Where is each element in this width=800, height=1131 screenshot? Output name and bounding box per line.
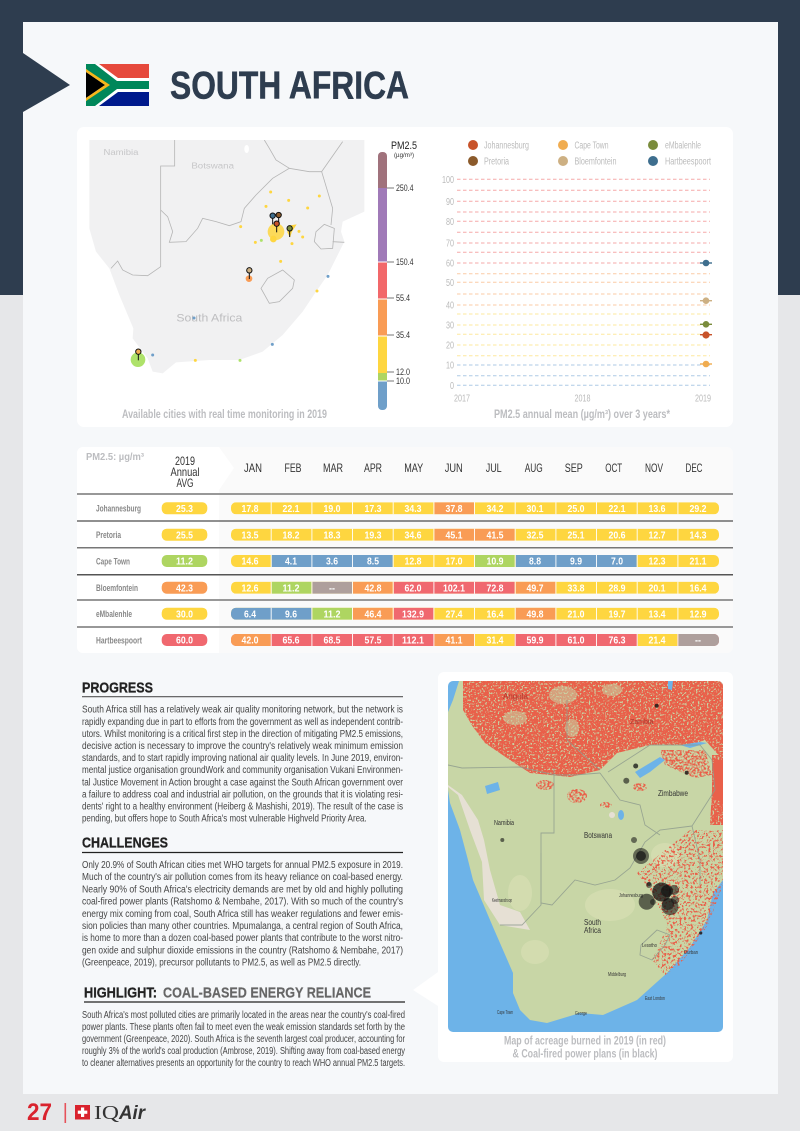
- country borders: [448, 700, 715, 960]
- monthly values: 34.3: [404, 503, 422, 515]
- monthly values: 12.8: [404, 556, 422, 568]
- text block: progress: utors. Whilst monitoring is a critical first step in the direction of mitigating PM2.5 emissions,: [82, 729, 403, 740]
- monthly values: 3.6: [326, 556, 338, 568]
- line chart: annual mean over 3 years: 0: [450, 381, 454, 392]
- legend: PM2.5 colour scale: 55.4: [396, 293, 410, 304]
- panel: burn map card: [413, 672, 733, 1062]
- monthly values: --: [695, 635, 701, 647]
- map pins: [136, 212, 292, 360]
- place labels: Africa: [584, 926, 601, 935]
- monthly values: 46.4: [364, 608, 382, 620]
- text block: challenges: Nearly 90% of South Africa's electricity demands are met by old and highly polluting: [82, 884, 403, 895]
- monthly values: 19.3: [364, 529, 382, 541]
- heading: progress: PROGRESS: [82, 680, 153, 697]
- text block: challenges: (Greenpeace, 2019), precursor pollutants to PM2.5, as well as PM2.5 directly.: [82, 958, 361, 969]
- place labels: Durban: [684, 950, 698, 956]
- heading: highlight: HIGHLIGHT:: [84, 984, 157, 1001]
- monthly values: 11.2: [282, 582, 300, 594]
- place labels: East London: [645, 996, 665, 1002]
- row labels: Johannesburg: [96, 504, 141, 514]
- monthly values: --: [329, 582, 335, 594]
- text block: progress: mental justice organisation groundWork and community organisation Vukani Environmen-: [82, 765, 403, 776]
- table header: FEB: [284, 461, 302, 475]
- monthly values: 11.2: [324, 608, 341, 620]
- text block: progress: South Africa still has a relatively weak air quality monitoring network, but the network is: [82, 705, 403, 716]
- table header: SEP: [565, 461, 583, 475]
- caption: burn map: Map of acreage burned in 2019 (in red): [504, 1036, 666, 1048]
- place labels: Cape Town: [497, 1010, 513, 1016]
- monthly values: 65.6: [282, 635, 300, 647]
- panel: monthly PM2.5 table: [77, 447, 733, 653]
- annual average pills: 25.3: [176, 503, 193, 515]
- desert coast: [448, 785, 530, 930]
- monthly values: 76.3: [608, 635, 626, 647]
- place labels: Botswana: [584, 831, 612, 840]
- monthly values: 12.3: [648, 556, 666, 568]
- monthly values: 31.4: [486, 635, 504, 647]
- row labels: Cape Town: [96, 556, 130, 568]
- line chart: annual mean over 3 years: 30: [446, 320, 454, 332]
- caption: annual chart: PM2.5 annual mean (µg/m³) over 3 years*: [494, 409, 670, 421]
- place labels: [492, 692, 698, 1017]
- legend: cities: Bloemfontein: [574, 156, 616, 168]
- row: Hartbeespoort: [231, 634, 719, 646]
- text block: progress: a failure to address coal and industrial air pollution, on the grounds that it is violating resi-: [82, 789, 403, 800]
- logo: IQAir: [75, 1102, 147, 1124]
- place labels: Middelburg: [608, 972, 626, 978]
- coal power plants: [500, 704, 702, 935]
- legend: PM2.5 colour scale: PM2.5: [391, 140, 417, 152]
- map: available cities with monitoring: Namibia: [103, 147, 139, 157]
- text block: highlight: roughly 3% of the world's coal production (Ambrose, 2019). Shifting away from coal-based energy: [82, 1046, 405, 1057]
- monthly values: 14.3: [690, 529, 707, 541]
- monthly values: 25.1: [568, 529, 585, 541]
- text block: challenges: is home to more than a dozen coal-based power plants that contribute to the worst nitro-: [82, 933, 403, 944]
- header ribbon notch: [23, 53, 70, 112]
- table header: [86, 451, 703, 490]
- monthly values: 16.4: [690, 582, 707, 594]
- table header: Annual: [170, 465, 200, 479]
- place labels: Johannesburg: [619, 893, 643, 899]
- legend: PM2.5 colour scale: (µg/m³): [394, 152, 414, 159]
- monthly values: 30.1: [526, 503, 544, 515]
- legend: PM2.5 colour scale: 35.4: [396, 330, 410, 341]
- text block: challenges: Only 20.9% of South African cities met WHO targets for annual PM2.5 exposure in 2019.: [82, 860, 403, 871]
- monthly values: 59.9: [526, 635, 544, 647]
- annual average pills: 30.0: [176, 608, 193, 620]
- table header: MAY: [404, 461, 423, 475]
- place labels: South: [584, 918, 601, 927]
- monthly values: 12.9: [690, 608, 707, 620]
- text block: highlight: power plants. These plants often fail to meet even the weak emission standards set forth by the: [82, 1022, 405, 1033]
- monthly values: 20.6: [608, 529, 626, 541]
- legend: cities: Cape Town: [574, 140, 608, 152]
- monthly values: 42.8: [364, 582, 382, 594]
- monthly values: 29.2: [690, 503, 707, 515]
- line chart: annual mean over 3 years: 20: [446, 340, 454, 352]
- divider bar: [64, 1103, 66, 1123]
- monthly values: 28.9: [608, 582, 626, 594]
- row: Pretoria: [231, 529, 719, 541]
- monthly values: 19.0: [324, 503, 341, 515]
- legend: cities: eMbalenhle: [665, 140, 701, 152]
- row: Johannesburg: [231, 502, 719, 514]
- monthly values: 41.1: [446, 635, 463, 647]
- monthly values: 4.1: [285, 556, 297, 568]
- line chart: annual mean over 3 years: 80: [446, 217, 454, 228]
- monthly values: 42.0: [242, 635, 259, 647]
- heading: challenges: CHALLENGES: [82, 835, 168, 852]
- monthly values: 25.0: [568, 503, 585, 515]
- line chart: annual mean over 3 years: 10: [446, 360, 454, 372]
- text block: highlight: South Africa's most polluted cities are primarily located in the areas near the country's coal-fired: [82, 1010, 405, 1021]
- legend: PM2.5 colour scale: 12.0: [396, 367, 410, 378]
- line chart: annual mean over 3 years: 90: [446, 197, 454, 208]
- monthly values: 22.1: [608, 503, 626, 515]
- monthly values: 112.1: [402, 635, 424, 647]
- text block: highlight: to cleaner alternatives presents an opportunity for the country to reach WHO annual PM2.5 targets.: [82, 1058, 405, 1069]
- legend: PM2.5 colour scale: 150.4: [396, 257, 414, 268]
- legend: cities: Hartbeespoort: [665, 156, 711, 168]
- logo: IQAir: Air: [118, 1103, 147, 1124]
- table header: 2019: [175, 454, 195, 468]
- legend: cities: Pretoria: [484, 156, 509, 168]
- monthly values: 72.8: [486, 582, 504, 594]
- monthly cells background: [231, 500, 719, 648]
- monthly values: 37.8: [446, 503, 463, 515]
- monthly values: 12.6: [242, 582, 259, 594]
- legend: PM2.5 colour scale: 10.0: [396, 376, 410, 387]
- text block: highlight: [82, 1010, 405, 1069]
- table header: AUG: [525, 461, 543, 475]
- map: available cities with monitoring: [89, 140, 364, 373]
- monthly values: 61.0: [568, 635, 585, 647]
- logo: IQAir: IQ: [94, 1102, 120, 1124]
- legend: PM2.5 colour scale: [378, 140, 417, 410]
- text block: progress: [82, 705, 404, 825]
- place labels: Keetmanshoop: [492, 898, 512, 904]
- line chart: annual mean over 3 years: 40: [446, 300, 454, 312]
- monthly values: 9.6: [285, 608, 297, 620]
- table header: JUL: [486, 461, 502, 475]
- monthly values: 18.3: [324, 529, 341, 541]
- monthly values: 8.8: [529, 556, 541, 568]
- text block: progress: rapidly expanding due in part to efforts from the government as well as independent contrib-: [82, 717, 403, 728]
- row: Cape Town: [231, 555, 719, 567]
- text block: challenges: coal-fired power plants (Ratshomo & Nembahe, 2017). With so much of the country's: [82, 897, 403, 908]
- monthly values: 49.7: [526, 582, 544, 594]
- caption: monitoring map: Available cities with real time monitoring in 2019: [122, 409, 327, 421]
- text block: progress: standards, and to start rapidly improving national air quality levels. In June 2019, environ-: [82, 753, 403, 764]
- icon: South African flag: [86, 64, 149, 106]
- monthly values: 18.2: [282, 529, 300, 541]
- burned areas: [463, 681, 723, 825]
- table header: PM2.5: µg/m³: [86, 451, 144, 463]
- annual average pills: 11.2: [176, 556, 193, 568]
- row: eMbalenhle: [231, 608, 719, 620]
- legend: PM2.5 colour scale: 250.4: [396, 183, 414, 194]
- text block: challenges: Much of the country's air pollution comes from its heavy reliance on coal-based energy.: [82, 872, 403, 883]
- monthly values: 34.6: [404, 529, 422, 541]
- monthly values: 12.7: [648, 529, 666, 541]
- text block: progress: pending, but offers hope to South Africa's most vulnerable Highveld Priority Area.: [82, 814, 367, 825]
- monthly values: 22.1: [282, 503, 300, 515]
- monthly values: 13.4: [648, 608, 666, 620]
- annual average pills: 25.5: [176, 529, 193, 541]
- line chart: annual mean over 3 years: 2019: [695, 394, 711, 404]
- panel: map, scale and annual chart: [77, 127, 733, 427]
- row labels: Bloemfontein: [96, 583, 138, 594]
- legend: cities: Johannesburg: [484, 140, 529, 152]
- row labels: Hartbeespoort: [96, 636, 143, 646]
- table header: NOV: [645, 461, 663, 475]
- monthly values: 20.1: [648, 582, 666, 594]
- row labels: Pretoria: [96, 530, 121, 541]
- text block: progress: tal Justice Movement in Action brought a case against the South African government over: [82, 777, 404, 788]
- monthly values: 21.1: [690, 556, 707, 568]
- text block: challenges: [82, 860, 403, 969]
- monthly values: 19.7: [608, 608, 626, 620]
- table header: AVG: [176, 476, 194, 490]
- monthly values: 16.4: [486, 608, 504, 620]
- text block: progress: decisive action is necessary to improve the country's relatively weak minimum emission: [82, 741, 403, 752]
- monthly values: 49.8: [526, 608, 544, 620]
- text block: highlight: government (Greenpeace, 2020). South Africa is the seventh largest coal producer, accounting for: [82, 1034, 405, 1045]
- monthly values: 34.2: [486, 503, 504, 515]
- caption: burn map: & Coal-fired power plans (in black): [512, 1048, 658, 1060]
- line chart: annual mean over 3 years: 60: [446, 258, 454, 270]
- monthly values: 13.6: [648, 503, 666, 515]
- monthly values: 8.5: [367, 556, 379, 568]
- annual average pills: 42.3: [176, 582, 193, 594]
- place labels: Zimbabwe: [658, 789, 688, 798]
- monthly values: 17.3: [364, 503, 382, 515]
- title: SOUTH AFRICA: [170, 65, 409, 108]
- monthly values: [242, 503, 707, 647]
- place labels: Namibia: [494, 820, 514, 827]
- caption: burn map: [504, 1036, 666, 1060]
- pale interior: [508, 843, 679, 964]
- place labels: Zambia: [630, 719, 653, 726]
- place labels: Angola: [503, 692, 528, 701]
- legend: cities: [468, 140, 711, 168]
- table header: JUN: [445, 461, 463, 475]
- text block: progress: dents' right to a healthy environment (Heiberg & Mashishi, 2019). The result of the case is: [82, 802, 403, 812]
- water bodies: [485, 681, 707, 820]
- line chart: annual mean over 3 years: 70: [446, 238, 454, 250]
- monthly values: 27.4: [446, 608, 463, 620]
- monthly values: 132.9: [402, 608, 424, 620]
- monthly values: 102.1: [443, 582, 465, 594]
- monthly values: 17.8: [242, 503, 259, 515]
- table header: OCT: [605, 461, 623, 475]
- place labels: Lesotho: [642, 943, 657, 949]
- line chart: annual mean over 3 years: 2017: [454, 394, 470, 404]
- table header: APR: [364, 461, 382, 475]
- monthly values: 21.4: [648, 635, 666, 647]
- monthly values: 17.0: [446, 556, 463, 568]
- map: available cities with monitoring: Botswana: [191, 160, 234, 170]
- monthly values: 68.5: [324, 635, 341, 647]
- monthly values: 45.1: [446, 529, 463, 541]
- monthly values: 14.6: [242, 556, 259, 568]
- line chart: annual mean over 3 years: [442, 175, 712, 404]
- line chart: annual mean over 3 years: 2018: [574, 394, 591, 404]
- text block: challenges: gen oxide and sulphur dioxide emissions in the country (Ratshomo & Nembahe, 2017): [82, 945, 403, 956]
- monthly values: 13.5: [242, 529, 259, 541]
- monthly values: 7.0: [611, 556, 623, 568]
- row labels: eMbalenhle: [96, 609, 132, 620]
- monthly values: 6.4: [244, 608, 256, 620]
- line chart: annual mean over 3 years: 100: [442, 175, 454, 186]
- monthly values: 9.9: [570, 556, 582, 568]
- map: acreage burned and coal plants: [448, 681, 723, 1032]
- row labels: [96, 504, 143, 646]
- annual average pills: [162, 502, 207, 647]
- table header: MAR: [323, 461, 343, 475]
- table header: DEC: [686, 461, 703, 475]
- text block: challenges: sion policies than many other countries. Mpumalanga, a central region of South Africa,: [82, 921, 403, 932]
- monthly values: 62.0: [404, 582, 422, 594]
- page number: 27: [27, 1099, 52, 1126]
- row: Bloemfontein: [231, 582, 719, 594]
- text block: challenges: energy mix coming from coal, South Africa still has weaker regulations and fewer emis-: [82, 909, 403, 920]
- monthly values: 33.8: [568, 582, 585, 594]
- heading: highlight: COAL-BASED ENERGY RELIANCE: [163, 984, 371, 1001]
- map: available cities with monitoring: South Africa: [176, 313, 243, 325]
- monthly values: 10.9: [486, 556, 504, 568]
- annual average pills: 60.0: [176, 635, 193, 647]
- place labels: George: [575, 1011, 587, 1017]
- monthly values: 32.5: [526, 529, 544, 541]
- monthly values: 41.5: [486, 529, 504, 541]
- monthly values: 57.5: [364, 635, 382, 647]
- monthly values: 21.0: [568, 608, 585, 620]
- line chart: annual mean over 3 years: 50: [446, 278, 454, 289]
- table header: JAN: [244, 461, 262, 475]
